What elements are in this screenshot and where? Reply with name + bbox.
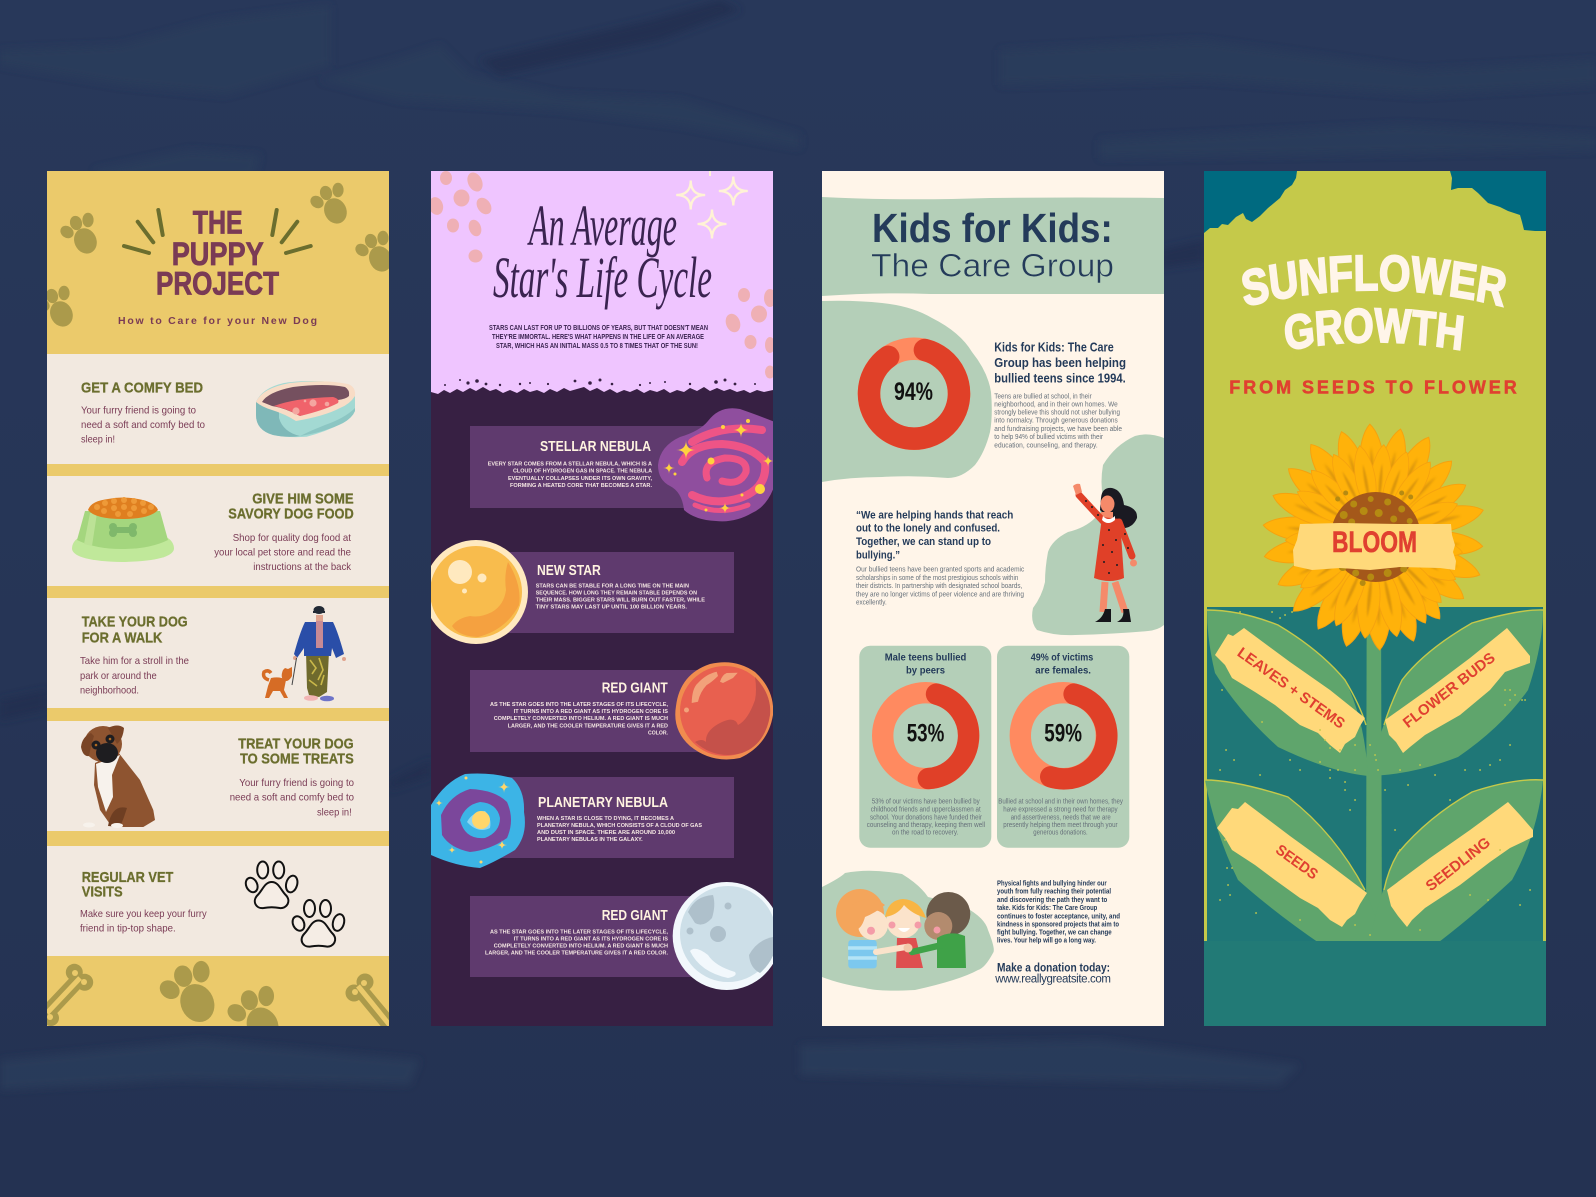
title <box>493 206 712 310</box>
speckles <box>1220 612 1530 935</box>
step: new star <box>424 540 734 644</box>
text block: since 1994: strongly believe this should not usher bullying <box>994 410 1120 417</box>
card: dog food: instructions at the back <box>253 561 352 573</box>
text block: since 1994: Group has been helping <box>994 356 1126 370</box>
card: vet visits: Make sure you keep your furry <box>80 908 207 920</box>
card: walk: Take him for a stroll in the <box>80 655 189 667</box>
step: red giant (moon) <box>470 882 781 990</box>
card: 49% of victims: Bullied at school and in their own homes, they <box>998 799 1123 806</box>
card: vet visits <box>47 846 389 956</box>
label: seedling: SEEDLING <box>1423 834 1494 895</box>
card: dog food <box>47 476 389 586</box>
step: red giant: IT TURNS INTO A RED GIANT AS ITS HYDROGEN CORE IS <box>514 709 668 715</box>
donut chart 59% <box>1020 693 1107 779</box>
card: treats: need a soft and comfy bed to <box>230 792 354 804</box>
card: dog food: Shop for quality dog food at <box>233 532 351 544</box>
header paw prints <box>34 183 396 330</box>
pink header <box>431 171 773 395</box>
card: vet visits: VISITS <box>82 884 123 901</box>
intro text: STAR, WHICH HAS AN INITIAL MASS 0.5 TO 8 TIMES THAT OF THE SUN! <box>496 343 698 350</box>
text block: since 1994: Teens are bullied at school, in their <box>994 393 1092 400</box>
footer paws and bones <box>47 960 389 1026</box>
step: planetary nebula: PLANETARY NEBULA <box>538 794 668 811</box>
icon: boxer dog <box>81 726 155 828</box>
step: stellar nebula: EVENTUALLY COLLAPSES UNDER ITS OWN GRAVITY, <box>508 476 652 482</box>
text block: closing message: Physical fights and bullying hinder our <box>997 879 1107 888</box>
step: stellar nebula: FORMING A HEATED CORE THAT BECOMES A STAR. <box>510 483 652 489</box>
step: planetary nebula: WHEN A STAR IS CLOSE TO DYING, IT BECOMES A <box>537 816 674 822</box>
text block: closing message: and discovering the path they want to <box>997 895 1108 904</box>
quote: “We are helping hands that reach <box>856 509 1013 521</box>
step: stellar nebula: STELLAR NEBULA <box>540 438 651 455</box>
card: dog food: GIVE HIM SOME <box>252 490 354 507</box>
panel: sunflower growth <box>1204 171 1546 1026</box>
label: seeds: SEEDS <box>1272 841 1321 883</box>
label: seeds <box>1217 802 1367 927</box>
step: red giant: LARGER, AND THE COOLER TEMPERATURE GIVES IT A RED <box>508 724 668 730</box>
text block: closing message: Make a donation today: <box>997 962 1110 974</box>
quote: scholarships in some of the most prestigious schools within <box>856 575 1018 582</box>
text block: since 1994: and fundraising projects, we have been able <box>994 426 1122 433</box>
title: PROJECT <box>156 265 279 301</box>
title <box>157 210 280 296</box>
step: red giant: RED GIANT <box>602 680 668 697</box>
label: leaves + stems <box>1215 628 1365 753</box>
step: red giant (moon): IT TURNS INTO A RED GIANT AS ITS HYDROGEN CORE IS <box>514 936 668 942</box>
solid ground strip <box>1204 941 1546 1026</box>
icon: moon <box>673 882 781 990</box>
title arched: SUNFLOWER <box>1242 254 1506 308</box>
card: walk: TAKE YOUR DOG <box>82 614 188 631</box>
label: seedling <box>1387 802 1533 927</box>
icon: planetary nebula <box>431 774 525 868</box>
card: 49% of victims: have expressed a strong need for therapy <box>1003 807 1118 814</box>
text block: since 1994: Kids for Kids: The Care <box>994 341 1114 355</box>
icon: stellar nebula <box>658 408 775 521</box>
text block: since 1994: neighborhood, and in their own homes. We <box>994 402 1118 409</box>
blob: top left <box>822 301 992 482</box>
text block: closing message: kindness in sponsored projects that aim to <box>997 919 1119 928</box>
text block: closing message <box>994 879 1120 986</box>
step: red giant <box>470 662 773 760</box>
title: The Care Group <box>871 248 1114 284</box>
card: 49% of victims <box>997 646 1129 848</box>
quote: their districts. In partnership with designated school boards, <box>856 583 1022 590</box>
quote: bullying.” <box>856 549 900 561</box>
text block: closing message: fight bullying. Together, we can change <box>997 927 1112 936</box>
card: male teens bullied: Male teens bullied <box>885 652 966 664</box>
intro text: STARS CAN LAST FOR UP TO BILLIONS OF YEARS, BUT THAT DOESN'T MEAN <box>489 325 708 332</box>
step: planetary nebula <box>431 774 734 868</box>
left bone <box>43 964 93 1026</box>
illustration: three kids <box>836 889 970 968</box>
blob: bottom left <box>822 871 994 991</box>
donut chart 94%: 94% <box>894 378 933 406</box>
corner brush strokes <box>1204 171 1546 233</box>
intro text <box>489 325 708 350</box>
illustration: woman waving <box>1073 484 1137 622</box>
card: 49% of victims: presently helping them meet through your <box>1003 822 1118 829</box>
icon: food bowl <box>72 497 174 562</box>
title: Kids for Kids: <box>872 205 1113 251</box>
title <box>872 212 1112 283</box>
card: treats: TREAT YOUR DOG <box>238 735 354 752</box>
stem and leaves <box>1205 600 1543 950</box>
card: walk: FOR A WALK <box>82 630 162 647</box>
card: male teens bullied: on the road to recovery. <box>892 830 958 837</box>
donut chart 94% <box>869 349 959 439</box>
card: 49% of victims: are females. <box>1035 665 1091 677</box>
seed head <box>1331 490 1421 586</box>
card: vet visits: REGULAR VET <box>82 869 173 886</box>
quote: out to the lonely and confused. <box>856 523 1000 535</box>
card: comfy bed: sleep in! <box>81 434 115 446</box>
quote <box>856 509 1025 606</box>
header band <box>822 197 1164 296</box>
bloom banner: BLOOM <box>1332 526 1417 559</box>
text block: since 1994: education, counseling, and therapy. <box>994 442 1098 449</box>
step: red giant (moon): COMPLETELY CONVERTED INTO HELIUM. A RED GIANT IS MUCH <box>494 944 668 950</box>
card: treats: sleep in! <box>317 806 352 818</box>
text block: closing message: take. Kids for Kids: The Care Group <box>997 903 1098 912</box>
step: planetary nebula: PLANETARY NEBULA, WHICH CONSISTS OF A CLOUD OF GAS <box>537 823 702 829</box>
subtitle: How to Care for your New Dog <box>118 315 317 327</box>
text block: since 1994: into normalcy. Through generous donations <box>994 418 1118 425</box>
step: new star: SEQUENCE. HOW LONG THEY REMAIN STABLE DEPENDS ON <box>536 591 697 597</box>
text block: since 1994 <box>994 341 1126 449</box>
card: walk <box>47 598 389 708</box>
card: male teens bullied: 53% of our victims have been bullied by <box>872 799 980 806</box>
title arched <box>1242 254 1506 351</box>
step: new star: NEW STAR <box>537 562 601 579</box>
subtitle: FROM SEEDS TO FLOWER <box>1229 377 1517 397</box>
card: walk: neighborhood. <box>80 684 139 696</box>
card: walk: park or around the <box>80 670 157 682</box>
inner petals <box>1285 444 1464 639</box>
card: comfy bed: need a soft and comfy bed to <box>81 419 205 431</box>
bloom banner <box>1293 523 1456 570</box>
title rays <box>124 210 311 253</box>
step: red giant (moon): AS THE STAR GOES INTO THE LATER STAGES OF ITS LIFECYCLE, <box>490 929 668 935</box>
text block: since 1994: to help 94% of bullied victims with their <box>994 434 1104 441</box>
label: flower buds: FLOWER BUDS <box>1400 649 1499 732</box>
title: An Average <box>527 193 677 258</box>
step: stellar nebula <box>470 408 775 521</box>
icon: new star <box>424 540 528 644</box>
step: red giant: COMPLETELY CONVERTED INTO HELIUM. A RED GIANT IS MUCH <box>494 716 668 722</box>
card: treats <box>47 721 389 831</box>
step: stellar nebula: EVERY STAR COMES FROM A STELLAR NEBULA, WHICH IS A <box>488 462 652 468</box>
step: new star: TINY STARS MAY LAST UP UNTIL 100 BILLION YEARS. <box>536 605 687 611</box>
blob: right <box>1032 434 1164 635</box>
icon: dog bed <box>256 381 355 437</box>
card: male teens bullied: by peers <box>906 665 945 677</box>
card: 49% of victims: generous donations. <box>1033 830 1088 837</box>
step: red giant: AS THE STAR GOES INTO THE LATER STAGES OF ITS LIFECYCLE, <box>490 702 668 708</box>
icon: man walking dog <box>264 606 346 701</box>
right bone <box>346 974 392 1028</box>
quote: Together, we can stand up to <box>856 536 991 548</box>
text block: closing message: lives. Your help will go a long way. <box>997 936 1096 945</box>
sunflower <box>1262 424 1486 650</box>
card: 49% of victims: and assertiveness, needs that we are <box>1011 814 1111 821</box>
card: comfy bed: GET A COMFY BED <box>81 380 203 397</box>
donut chart 53% <box>883 693 969 779</box>
text block: closing message: www.reallygreatsite.com <box>994 974 1111 986</box>
decorative sparkles <box>676 171 748 238</box>
quote: excellently. <box>856 599 887 606</box>
quote: Our bullied teens have been granted sports and academic <box>856 567 1025 574</box>
panel: the puppy project <box>34 171 396 1048</box>
title: PUPPY <box>172 236 264 272</box>
card: comfy bed <box>47 354 389 464</box>
step: new star: STARS CAN BE STABLE FOR A LONG TIME ON THE MAIN <box>536 584 689 590</box>
card: treats: Your furry friend is going to <box>239 777 354 789</box>
quote: they are no longer victims of peer violence and are thriving <box>856 591 1024 598</box>
card: dog food: your local pet store and read the <box>214 547 351 559</box>
step: planetary nebula: PLANETARY NEBULAS IN THE GALAXY. <box>537 837 643 843</box>
card: male teens bullied: school. Your donations have funded their <box>870 814 983 821</box>
text block: since 1994: bullied teens since 1994. <box>994 372 1126 386</box>
label: leaves + stems: LEAVES + STEMS <box>1234 644 1348 732</box>
step: red giant: COLOR. <box>648 731 668 737</box>
text block: closing message: youth from fully reaching their potential <box>997 887 1111 896</box>
card: dog food: SAVORY DOG FOOD <box>228 505 354 522</box>
card: vet visits: friend in tip-top shape. <box>80 923 176 935</box>
title: Star's Life Cycle <box>493 245 712 310</box>
torn edge <box>431 378 773 395</box>
card: male teens bullied <box>859 646 991 848</box>
title arched: GROWTH <box>1284 308 1464 351</box>
intro text: THEY'RE IMMORTAL. HERE'S WHAT HAPPENS IN THE LIFE OF AN AVERAGE <box>492 334 704 341</box>
text block: closing message: continues to foster acceptance, unity, and <box>997 911 1120 920</box>
panel: kids for kids <box>822 171 1164 1026</box>
outer petals <box>1262 424 1486 650</box>
step: red giant (moon): LARGER, AND THE COOLER TEMPERATURE GIVES IT A RED COLOR. <box>485 951 668 957</box>
card: male teens bullied: childhood friends and upperclassmen at <box>871 807 981 814</box>
card: comfy bed: Your furry friend is going to <box>81 404 196 416</box>
step: planetary nebula: AND DUST IN SPACE. THERE ARE AROUND 10,000 <box>537 830 675 836</box>
donut chart 53%: 53% <box>907 720 944 748</box>
step: red giant (moon): RED GIANT <box>602 907 668 924</box>
decorative blush dots <box>427 170 776 378</box>
step: new star: THEIR MASS. BIGGER STARS WILL BURN OUT FASTER, WHILE <box>536 598 705 604</box>
card: male teens bullied: counseling and therapy, keeping them well <box>867 822 985 829</box>
step: stellar nebula: CLOUD OF HYDROGEN GAS IN SPACE. THE NEBULA <box>513 469 652 475</box>
panel: star life cycle <box>424 170 781 1026</box>
card: 49% of victims: 49% of victims <box>1031 652 1093 664</box>
label: flower buds <box>1385 628 1530 753</box>
teal ground <box>1207 607 1543 947</box>
donut chart 59%: 59% <box>1044 720 1082 748</box>
icon: outlined paw prints <box>244 862 346 947</box>
icon: red planet <box>675 662 773 760</box>
card: treats: TO SOME TREATS <box>240 750 354 767</box>
title: THE <box>193 204 243 240</box>
